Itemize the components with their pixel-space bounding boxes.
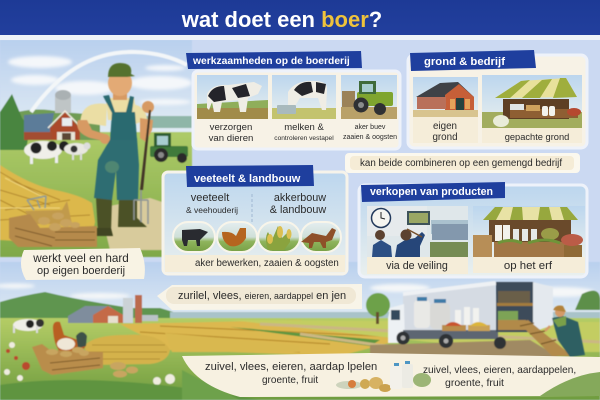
flowers bbox=[4, 342, 175, 385]
tractor bbox=[150, 133, 188, 163]
ground path bbox=[100, 198, 165, 250]
caption: akker bewerken: aker buev bbox=[355, 124, 385, 131]
image: eigen boerderij bbox=[413, 77, 478, 117]
icon: crate with potatoes bbox=[9, 196, 97, 247]
barn bbox=[24, 113, 54, 135]
barn 2 bbox=[68, 306, 125, 323]
image: via de veiling bbox=[367, 206, 468, 257]
icon: potatoes and milk bbox=[336, 361, 431, 392]
callout: werkt veel en hard: werkt veel en hard bbox=[33, 252, 129, 265]
title band bbox=[0, 0, 600, 40]
callout: kan beide combineren bbox=[345, 153, 580, 173]
panel: grond en bedrijf bbox=[408, 55, 587, 148]
strip: bottom products bbox=[182, 353, 600, 397]
caption: verzorgen van dieren: verzorgen bbox=[210, 122, 252, 133]
header: werkzaamheden op de boerderij bbox=[186, 51, 362, 69]
caption: verzorgen van dieren: van dieren bbox=[209, 133, 253, 144]
truck bbox=[370, 281, 585, 358]
header: verkopen van producten: verkopen van producten bbox=[370, 186, 493, 198]
caption: melken en controleren veestapel: melken & bbox=[284, 122, 324, 133]
icon: graan bbox=[258, 222, 300, 252]
caption: gepachte grond: gepachte grond bbox=[505, 132, 569, 142]
scene: lower countryside bbox=[0, 262, 600, 400]
header: grond en bedrijf bbox=[410, 50, 536, 71]
strip: aker bewerken bbox=[165, 255, 345, 272]
image: op het erf bbox=[473, 206, 585, 257]
scene: farm landscape at left bbox=[0, 40, 192, 257]
panel: veeteelt en landbouw bbox=[163, 172, 347, 274]
strip: aker bewerken: aker bewerken, zaaien & oogsten bbox=[195, 258, 339, 269]
callout: werkt veel en hard bbox=[21, 248, 145, 280]
callout: kan beide combineren: kan beide combineren op een gemengd bedrijf bbox=[360, 158, 562, 169]
icon: farmer bbox=[77, 63, 154, 236]
tree bbox=[0, 94, 30, 150]
caption: akker bewerken: zaaien & oogsten bbox=[343, 134, 397, 141]
image: melken bbox=[272, 75, 336, 119]
caption: via de veiling: via de veiling bbox=[386, 260, 448, 272]
panel: werkzaamheden op de boerderij bbox=[193, 71, 400, 149]
arc bbox=[31, 52, 187, 112]
panel: verkopen van producten bbox=[359, 185, 587, 277]
callout: werkt veel en hard: op eigen boerderij bbox=[37, 265, 125, 277]
caption: eigen grond: eigen bbox=[433, 121, 457, 132]
subheading: veeteelt en veehouderij: & veehouderij bbox=[186, 205, 238, 215]
image: koe verzorgen bbox=[197, 75, 268, 119]
rooster bbox=[53, 322, 86, 352]
hay bale bbox=[165, 333, 300, 352]
image: tractor bbox=[341, 75, 397, 119]
header: veeteelt en landbouw bbox=[186, 165, 314, 187]
header: grond en bedrijf: grond & bedrijf bbox=[424, 56, 505, 68]
text: zuivel, vlees, eieren, aardappelen right: zuivel, vlees, eieren, aardappelen, bbox=[423, 365, 576, 376]
subheading: akkerbouw en landbouw: akkerbouw bbox=[274, 192, 326, 204]
silo bbox=[55, 95, 71, 113]
text: zuivel, vlees, eieren, aardappelen right: groente, fruit bbox=[445, 377, 504, 389]
cow lower bbox=[13, 319, 43, 331]
text: zuivel, vlees, eieren, aardappelen: zuivel, vlees, eieren, aardap lpelen bbox=[205, 361, 377, 373]
title: wat doet een boer? bbox=[181, 7, 382, 32]
cows bbox=[24, 141, 90, 164]
icon: koe bbox=[173, 222, 215, 252]
icon: kip bbox=[217, 222, 257, 252]
caption: melken en controleren veestapel: controleren vestapel bbox=[274, 135, 334, 142]
header: verkopen van producten bbox=[361, 182, 505, 202]
callout: zurilel, vlees, eieren bbox=[157, 284, 362, 310]
caption: eigen grond: grond bbox=[432, 132, 458, 143]
image: marktkraam bbox=[482, 75, 582, 128]
subheading: akkerbouw en landbouw: & landbouw bbox=[270, 204, 326, 216]
header: werkzaamheden op de boerderij: werkzaamheden op de boerderij bbox=[192, 56, 350, 67]
subheading: veeteelt en veehouderij: veeteelt bbox=[191, 192, 229, 204]
hay bbox=[0, 165, 95, 245]
crate lower bbox=[32, 344, 103, 375]
divider bbox=[251, 194, 253, 222]
caption: op het erf: op het erf bbox=[504, 260, 553, 272]
text: zuivel, vlees, eieren, aardappelen: groente, fruit bbox=[262, 375, 318, 386]
callout: zurilel, vlees, eieren: zurilel, vlees, eieren, aardappel en jen bbox=[178, 290, 346, 302]
header: veeteelt en landbouw: veeteelt & landbouw bbox=[194, 173, 301, 185]
icon: dier bbox=[301, 222, 341, 252]
